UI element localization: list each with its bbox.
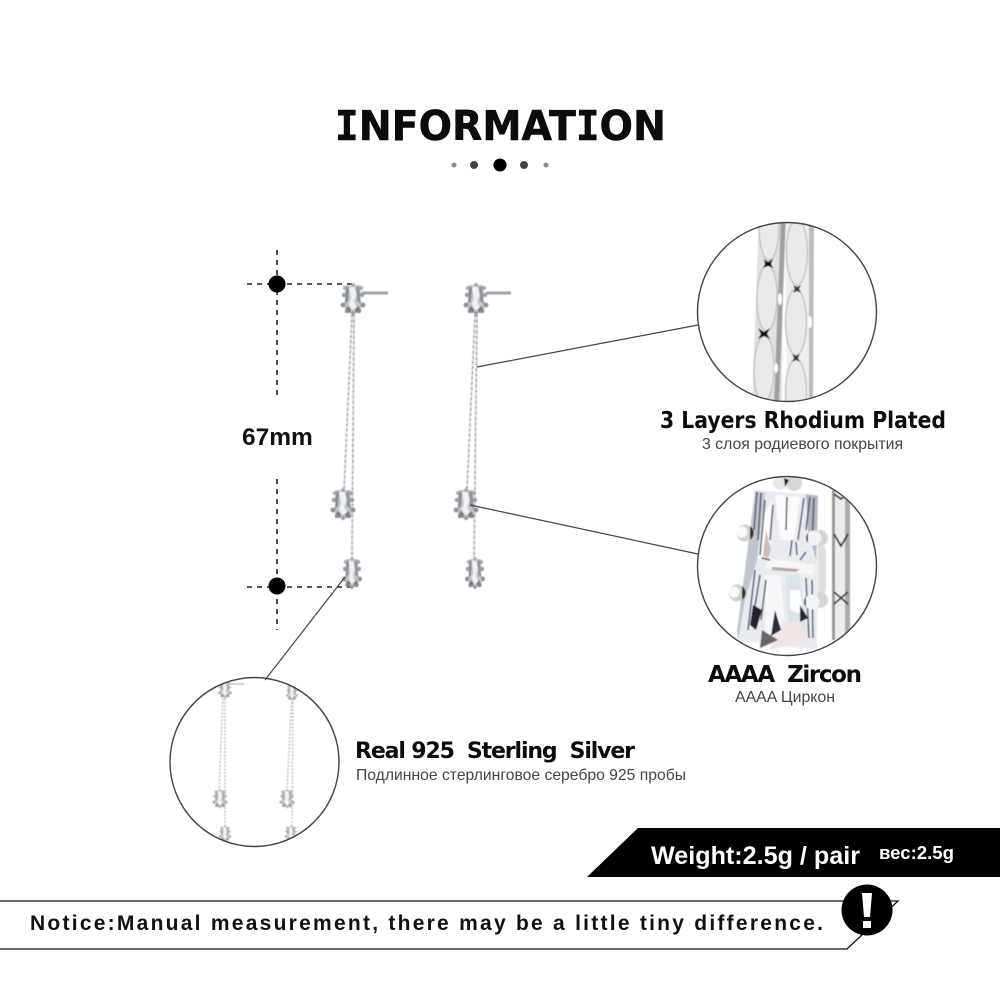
icon: exclamation [842, 884, 892, 936]
notice text: Notice:Manual measurement, there may be a little tiny difference. [30, 912, 823, 935]
magnifier: zircon [698, 475, 876, 656]
callout lines [265, 325, 698, 680]
magnifier: rhodium chain [696, 222, 878, 402]
heading: rhodium: 3 Layers Rhodium Plated [660, 408, 946, 434]
left earring [331, 283, 388, 589]
notice bar [0, 884, 898, 949]
subheading: zircon: AAAA Циркон [735, 689, 835, 706]
weight banner [587, 828, 1000, 877]
title dots [452, 158, 548, 172]
heading: zircon: AAAA Zircon [708, 662, 862, 688]
title: INFORMATION [335, 102, 666, 150]
dimension marker: 67mm [242, 250, 355, 630]
right earring [454, 283, 511, 589]
weight text: russian: вес:2.5g [879, 843, 954, 863]
subheading: silver: Подлинное стерлинговое серебро 925 пробы [356, 767, 686, 784]
dimension label: 67mm [242, 424, 313, 451]
magnifier: sterling silver pair [170, 678, 339, 846]
subheading: rhodium: 3 слоя родиевого покрытия [702, 436, 903, 453]
heading: silver: Real 925 Sterling Silver [355, 739, 635, 764]
weight text: Weight:2.5g / pair [651, 842, 860, 870]
